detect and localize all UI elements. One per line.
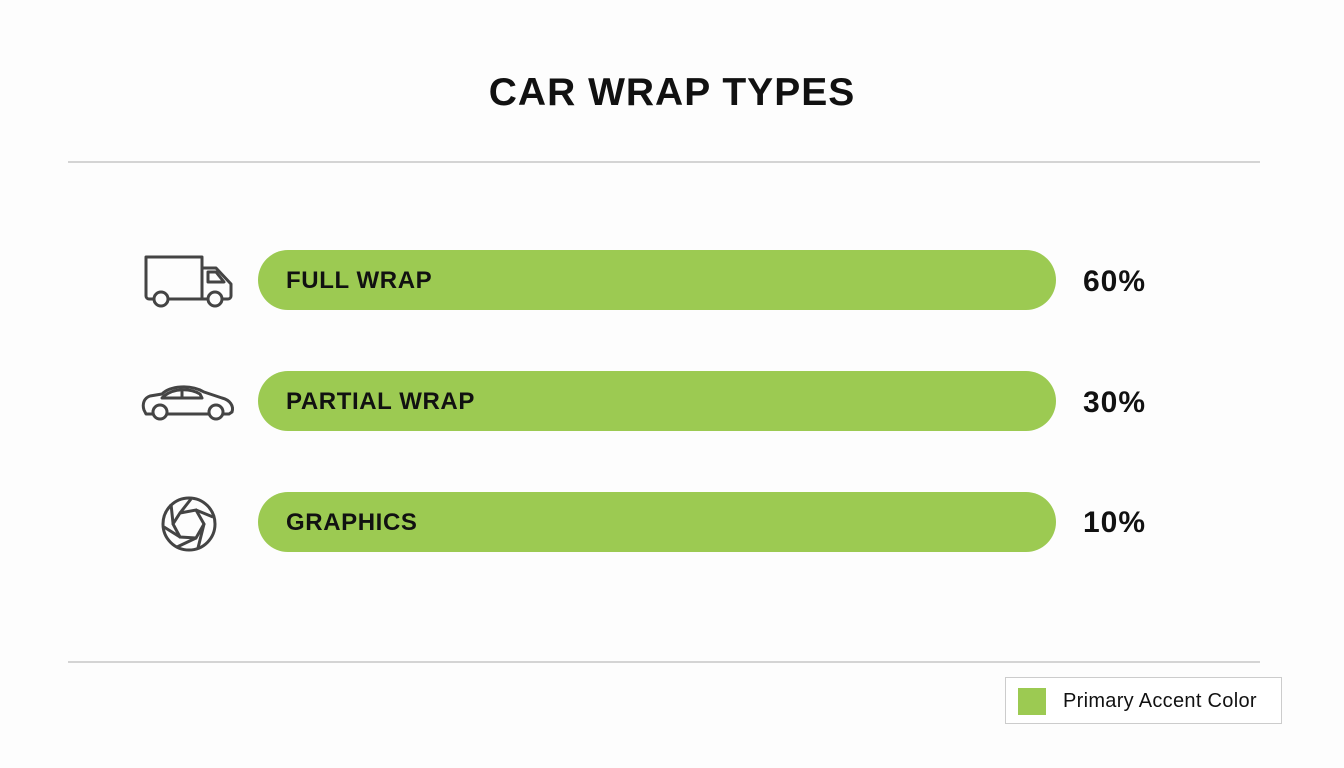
bar: partial wrap — [258, 371, 1056, 431]
icon: aperture — [162, 496, 216, 552]
bar: partial wrap: PARTIAL WRAP — [286, 388, 475, 415]
bar: full wrap — [258, 250, 1056, 310]
legend swatch — [1018, 688, 1046, 715]
icon: car — [142, 385, 234, 420]
bar: graphics — [258, 492, 1056, 552]
value: 30%: 30% — [1083, 386, 1146, 419]
legend — [1005, 677, 1282, 724]
bar: full wrap: FULL WRAP — [286, 267, 432, 294]
bar: graphics: GRAPHICS — [286, 509, 417, 536]
icon: truck — [144, 256, 232, 308]
value: 10%: 10% — [1083, 506, 1146, 539]
legend label: Primary Accent Color — [1063, 690, 1257, 712]
title: CAR WRAP TYPES — [489, 71, 855, 114]
value: 60%: 60% — [1083, 265, 1146, 298]
